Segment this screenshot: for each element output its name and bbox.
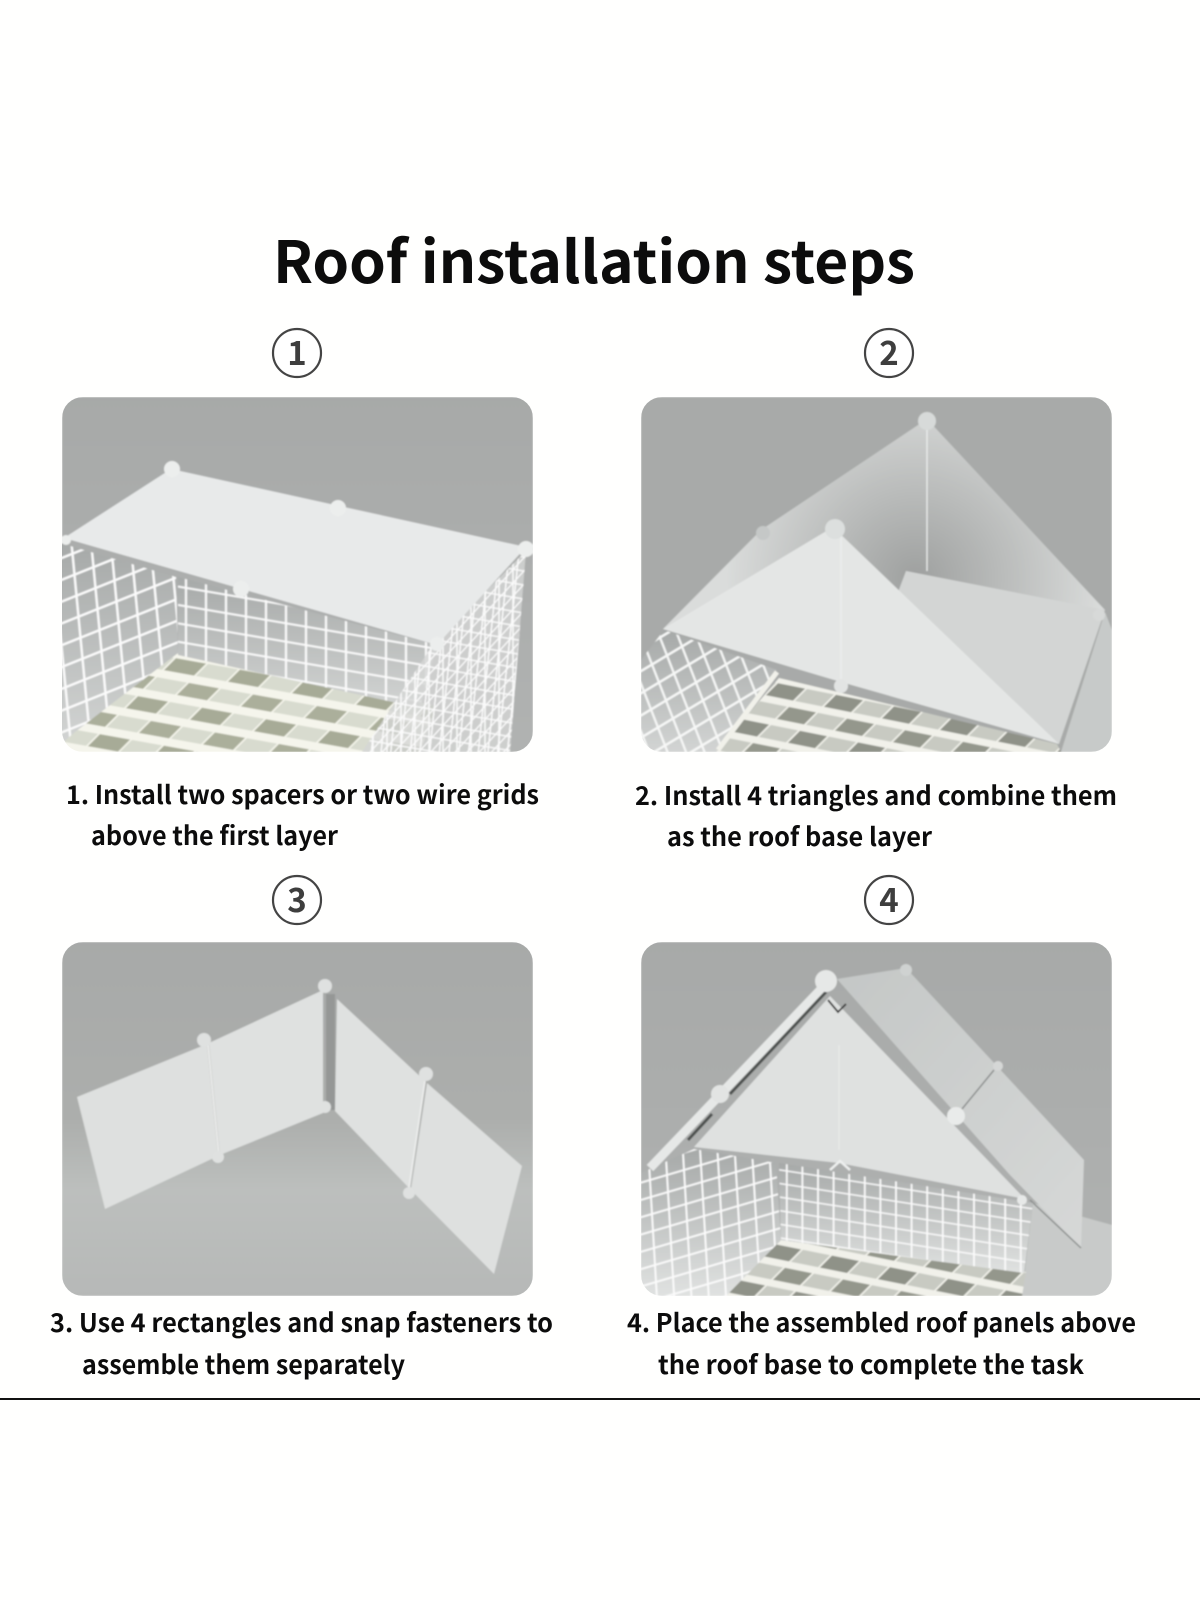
step number 3 badge: 3 [287,874,307,922]
step number 4 badge [865,874,913,924]
title: Roof installation steps [273,216,915,300]
connectors [711,964,1027,1205]
wire grid: back wall [779,1163,1033,1273]
right wall strip [1061,612,1112,752]
caption: step 2 [635,776,1117,854]
panel: step 2 photo, four triangles forming the roof base [641,397,1112,752]
caption: step 4: the roof base to complete the task [658,1345,1085,1382]
right panel pair [335,999,522,1274]
bedding floor [60,653,437,752]
caption: step 1: above the first layer [91,816,339,853]
step number 1 badge: 1 [287,327,307,375]
caption: step 3 [50,1303,553,1382]
caption: step 2: 2. Install 4 triangles and combine them [635,776,1117,813]
wire grid: left wall [60,543,178,745]
caption: step 2: as the roof base layer [667,817,933,854]
centre seams and connectors [756,412,1105,693]
snap fasteners [197,979,433,1199]
panel: step 1 photo, flat roof spacers on wire cage [60,397,534,752]
caption: step 4: 4. Place the assembled roof panels above [627,1303,1136,1340]
left panel pair [77,990,323,1209]
panel: step 3 photo, four rectangles joined with snap fasteners [62,942,533,1296]
wire grid: back wall [178,577,437,708]
front triangle [663,527,1059,744]
caption: step 1 [66,775,539,853]
front triangle [694,996,1025,1199]
wire grid: right wall [362,551,526,752]
lower right triangle [880,571,1105,744]
bedding floor [716,678,1061,752]
right lower floor [1022,1203,1112,1296]
caption: step 1: 1. Install two spacers or two wire grids [66,775,539,812]
caption: step 3: 3. Use 4 rectangles and snap fasteners to [50,1303,553,1340]
roof panels behind [837,968,1084,1248]
gap post [326,994,335,1110]
step number 4 badge: 4 [879,874,899,922]
back triangle, shaded [663,419,1105,629]
step number 3 badge [273,874,321,924]
caption: step 4 [627,1303,1136,1382]
wire grid: left wall [641,1149,781,1296]
step number 2 badge [865,327,913,377]
roof panel lower edge and seam [962,1070,1081,1248]
wire grid: left wall [641,630,777,752]
tube and side edge [650,984,826,1168]
caption: step 3: assemble them separately [82,1345,405,1382]
step number 2 badge: 2 [879,327,899,375]
panel: step 4 photo, completed roof on cage [641,942,1112,1296]
roof spacer panels [64,469,526,645]
step number 1 badge [273,327,321,377]
snap connectors [61,461,534,651]
bedding floor [724,1240,1026,1296]
